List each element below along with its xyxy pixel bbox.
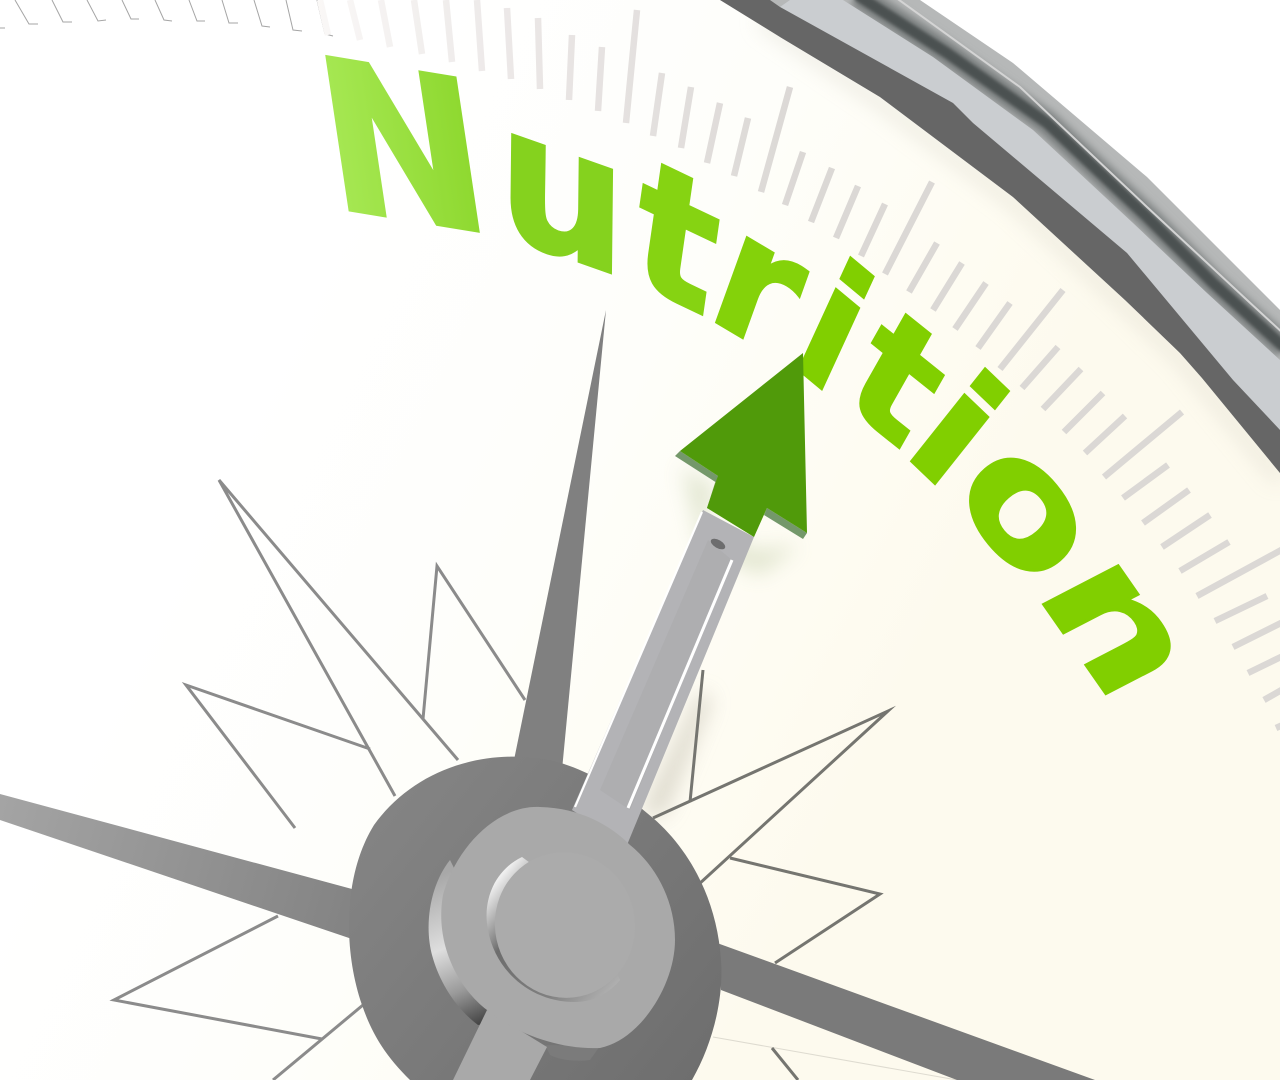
arrow right wing side	[764, 508, 807, 539]
letter r: r	[691, 171, 830, 395]
title: Nutrition	[303, 13, 1242, 723]
rim highlight line	[895, 0, 1280, 335]
rim dark inner band	[720, 0, 1280, 473]
needle slot mark	[709, 537, 727, 551]
rose outline south-east faint	[713, 1037, 957, 1080]
rose outline south-east stub	[772, 1048, 798, 1080]
letter t: t	[820, 274, 975, 485]
rose outline east	[730, 858, 880, 963]
rim soft shadow	[857, 0, 1280, 348]
hub cap	[481, 839, 649, 1011]
hub disc	[441, 807, 675, 1048]
compass point west	[0, 794, 352, 939]
rim outer band	[770, 0, 1280, 473]
needle right highlight	[628, 560, 732, 808]
needle tail	[453, 1010, 547, 1080]
compass point north	[514, 310, 606, 770]
letter i: i	[772, 225, 895, 434]
scale tick marks	[320, 0, 1280, 728]
letter N: N	[303, 13, 504, 284]
letter n: n	[1002, 525, 1242, 723]
hub cap edge	[487, 857, 620, 1002]
compass centre ring	[349, 757, 721, 1080]
green arrow head	[675, 353, 807, 539]
rose outline south-west	[114, 916, 322, 1039]
letter o: o	[920, 397, 1142, 618]
needle shadow	[640, 690, 712, 815]
letter u: u	[497, 58, 627, 323]
needle left highlight	[575, 512, 702, 807]
rose outline north-east	[653, 711, 888, 885]
letter t: t	[622, 118, 732, 359]
faint scale marks at the top left	[0, 0, 333, 36]
rose outline west	[186, 685, 370, 828]
arrow neck side	[707, 476, 718, 510]
letter i: i	[877, 338, 1035, 524]
needle shaft	[572, 510, 754, 845]
arrow face	[680, 353, 807, 537]
rose outline lower-left stub	[273, 1005, 363, 1080]
compass point east	[717, 943, 1095, 1080]
compass needle	[441, 510, 754, 1080]
arrow shadow	[682, 465, 800, 575]
rim light band	[780, 0, 1280, 430]
rim dark stripe	[857, 0, 1280, 348]
arrow left wing side	[675, 451, 718, 483]
rose outline north	[423, 566, 525, 719]
needle recess	[600, 540, 732, 810]
metal rim	[720, 0, 1280, 473]
hub lower shadow	[545, 1045, 600, 1061]
compass rose outlines	[114, 480, 957, 1080]
rose outline north-west long	[219, 480, 458, 796]
rose outline north-north-east	[690, 670, 703, 802]
hub side wall	[429, 860, 505, 1025]
rim shadow on face	[760, 20, 1280, 480]
